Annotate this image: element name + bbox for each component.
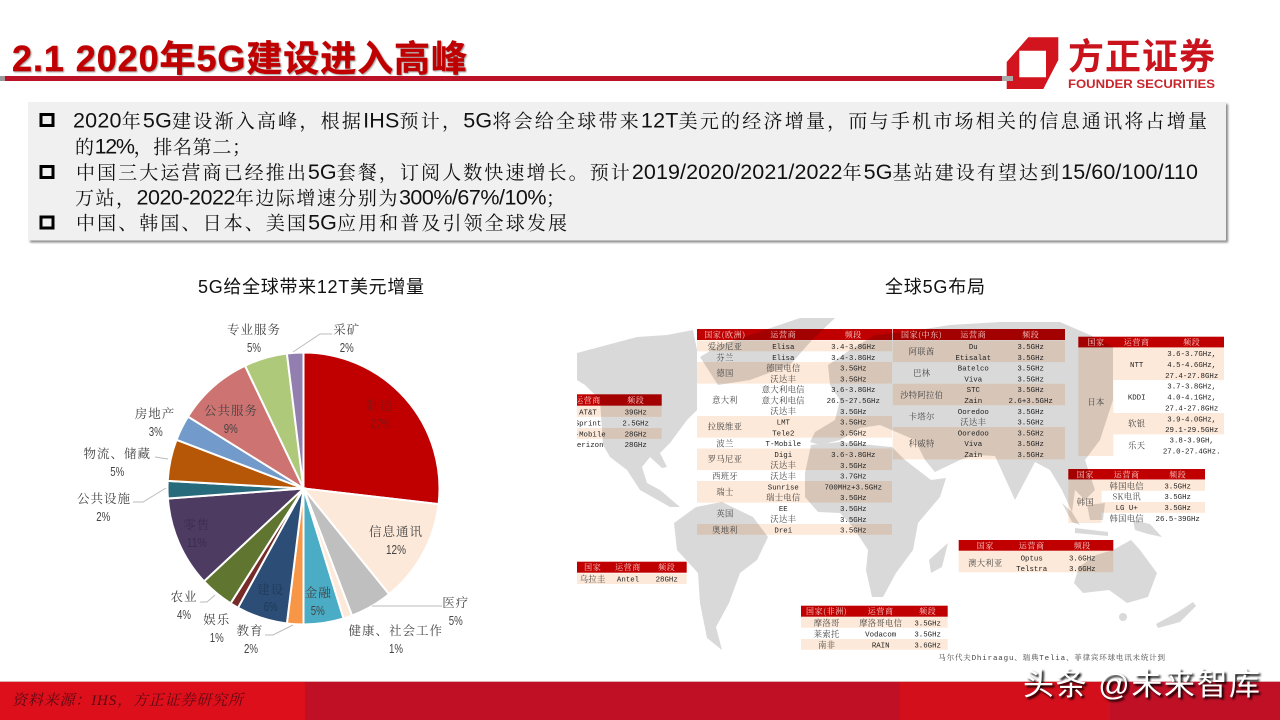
table: Europe: 沃达丰: [770, 470, 797, 482]
panel: key points: [28, 102, 1226, 240]
table: Africa: 莱索托: [814, 628, 840, 640]
table: Japan: KDDI: [1128, 394, 1146, 402]
table: Africa: 3.5GHz: [914, 620, 941, 628]
bullet point 2: 中国三大运营商已经推出5G套餐，订阅人数快速增长。预计2019/2020/2021/2022年5G基站建设有望达到15/60/100/110: [76, 160, 1198, 184]
table: Korea: [1068, 469, 1205, 524]
table: Korea: 韩国电信: [1110, 512, 1144, 524]
table: United States: Verizon: [572, 442, 604, 450]
table: Europe: 3.5GHz: [840, 495, 867, 503]
table: Africa: 3.6GHz: [914, 642, 941, 650]
pie chart: 12T increment by industry: 健康、社会工作: [348, 623, 443, 638]
table: Middle East: Du: [969, 344, 978, 352]
table: Korea: 国家: [1077, 470, 1094, 480]
map footnote: 马尔代夫Dhiraagu、瑞典Telia、菲律宾环球电讯未统计到: [938, 652, 1166, 663]
table: Japan: NTT: [1130, 362, 1144, 370]
table: Japan: 3.7-3.8GHz,: [1167, 384, 1216, 392]
table: United States: Sprint: [575, 420, 601, 428]
table: Middle East: 3.5GHz: [1017, 376, 1044, 384]
table: Japan: 3.8-3.9GH,: [1170, 438, 1214, 446]
table: United States: 运营商: [575, 395, 601, 406]
table: Europe: 沃达丰: [770, 405, 797, 417]
table: Europe: Elisa: [772, 344, 795, 352]
title rule: [0, 76, 1013, 81]
table: Middle East: 3.5GHz: [1017, 441, 1044, 449]
table: Europe: T-Mobile: [766, 441, 801, 449]
pie chart: 12T increment by industry: 教育: [236, 623, 264, 638]
pie chart: 12T increment by industry: 2%: [96, 510, 110, 524]
table: Europe: LMT: [777, 420, 791, 428]
pie chart: 12T increment by industry: 5%: [311, 604, 325, 618]
table: Africa: Vodacom: [865, 632, 897, 640]
table: Japan: 27.4-27.8GHz: [1165, 406, 1218, 414]
table: Africa: 摩洛哥: [814, 617, 840, 629]
table: Europe: 沃达丰: [770, 373, 797, 385]
pie chart: 12T increment by industry: 医疗: [442, 596, 469, 610]
table: Europe: 芬兰: [716, 351, 734, 363]
table: Japan: 3.6-3.7GHz,: [1167, 351, 1216, 359]
bullet point 2: [41, 160, 1198, 210]
table: Europe: 3.4-3.8GHz: [831, 344, 875, 352]
bullet point 1: 2020年5G建设渐入高峰，根据IHS预计，5G将会给全球带来12T美元的经济增量，而与手机市场相关的信息通讯将占增量: [73, 108, 1209, 132]
table: Japan: 国家: [1087, 337, 1105, 348]
table: Middle East: 3.5GHz: [1017, 430, 1044, 438]
table: Middle East: STC: [967, 387, 981, 395]
table: Middle East: 巴林: [913, 367, 931, 379]
bullet point 1: [41, 108, 1209, 158]
table: Europe: 3.5GHz: [840, 506, 867, 514]
table: Uruguay: Antel: [617, 576, 640, 584]
table: Europe: Tele2: [772, 430, 794, 438]
table: Europe: [697, 329, 892, 536]
watermark: 头条 @未来智库: [1023, 667, 1260, 702]
pie chart: 12T increment by industry: 金融: [305, 585, 332, 600]
table: Europe: 西班牙: [712, 470, 738, 482]
table: Africa: [801, 606, 948, 651]
table: Europe: 国家(欧洲): [704, 330, 746, 340]
table: Australia: 3.6GHz: [1069, 566, 1096, 574]
table: Australia: 运营商: [1019, 540, 1045, 551]
pie chart: 12T increment by industry: 5%: [110, 465, 124, 479]
table: Middle East: Ooredoo: [958, 430, 989, 438]
table: Europe: 3.5GHz: [840, 528, 867, 536]
pie chart: 12T increment by industry: 5%: [247, 341, 261, 355]
logo: Founder Securities: FOUNDER SECURITIES: [1068, 77, 1215, 91]
table: Middle East: [893, 329, 1065, 460]
table: Africa: 国家(非洲): [806, 606, 847, 617]
table: Europe: 波兰: [716, 438, 734, 450]
table: Middle East: 沃达丰: [960, 416, 987, 428]
pie chart: 12T increment by industry: 1%: [389, 642, 403, 656]
pie chart: 12T increment by industry: 2%: [244, 642, 258, 656]
table: Middle East: Etisalat: [956, 355, 991, 363]
table: Korea: 运营商: [1114, 470, 1140, 480]
table: Europe: 沃达丰: [770, 513, 797, 525]
table: Australia: Optus: [1021, 556, 1043, 564]
table: Europe: 奥地利: [712, 524, 738, 536]
table: Middle East: 3.5GHz: [1017, 409, 1044, 417]
table: Africa: 3.5GHz: [914, 632, 941, 640]
table: Australia: 澳大利亚: [968, 557, 1002, 569]
pie chart: 12T increment by industry: 4%: [177, 608, 191, 622]
table: Japan: 27.4-27.8GHz: [1165, 373, 1218, 381]
pie chart: 12T increment by industry: 12%: [386, 543, 406, 557]
table: Europe: Elisa: [772, 355, 795, 363]
table: Middle East: 频段: [1022, 330, 1039, 340]
table: Uruguay: 运营商: [615, 562, 641, 573]
table: Uruguay: 乌拉圭: [580, 573, 606, 585]
table: Korea: 韩国电信: [1110, 480, 1144, 492]
table: Middle East: 运营商: [960, 330, 986, 340]
table: Korea: 频段: [1169, 470, 1186, 480]
table: Middle East: Zain: [964, 452, 982, 460]
pie chart: 12T increment by industry: 农业: [170, 590, 198, 604]
pie chart: 12T increment by industry: 6%: [264, 600, 278, 614]
table: Europe: 频段: [845, 330, 862, 340]
table: Middle East: 科威特: [909, 438, 935, 450]
table: Japan: 4.5-4.6GHz,: [1167, 362, 1216, 370]
table: Uruguay: 28GHz: [656, 576, 678, 584]
table: Korea: SK电讯: [1112, 490, 1141, 502]
table: Europe: 瑞士: [716, 486, 734, 498]
logo: Founder Securities: [1002, 36, 1215, 91]
pie chart: 12T increment by industry: 制造: [366, 398, 394, 413]
world map: [577, 318, 1196, 650]
pie chart: 12T increment by industry: 零售: [183, 517, 210, 532]
source note: 资料来源：IHS，方正证券研究所: [12, 692, 246, 709]
table: Japan: 软银: [1128, 418, 1146, 430]
table: Middle East: 3.5GHz: [1017, 355, 1044, 363]
table: Europe: 意大利电信: [762, 384, 805, 396]
table: Australia: [959, 540, 1113, 574]
table: Europe: 3.7GHz: [840, 474, 867, 482]
table: Japan: 29.1-29.5GHz: [1165, 427, 1218, 435]
table: Korea: 3.5GHz: [1164, 505, 1191, 513]
table: Europe: 爱沙尼亚: [708, 340, 742, 352]
pie chart: 12T increment by industry: 物流、储藏: [84, 446, 151, 461]
pie chart: 12T increment by industry: 房地产: [135, 406, 175, 421]
pie chart: 12T increment by industry: 采矿: [333, 323, 360, 337]
table: United States: 28GHz: [625, 432, 647, 440]
table: Australia: 3.6GHz: [1069, 556, 1096, 564]
table: Europe: 意大利电信: [762, 394, 805, 406]
table: Japan: 频段: [1183, 337, 1200, 348]
table: Europe: 3.5GHz: [840, 376, 867, 384]
table: Europe: 运营商: [770, 330, 796, 340]
pie chart: 12T increment by industry: 建设: [257, 582, 284, 597]
table: Europe: 德国: [716, 367, 734, 379]
table: Africa: 频段: [919, 606, 936, 617]
table: Europe: 意大利: [712, 394, 738, 406]
logo: Founder Securities: 方正证券: [1068, 36, 1215, 77]
table: Japan: 乐天: [1128, 440, 1146, 452]
heading: pie chart: 5G给全球带来12T美元增量: [198, 277, 424, 297]
table: Middle East: 3.5GHz: [1017, 387, 1044, 395]
table: Middle East: 3.5GHz: [1017, 366, 1044, 374]
table: Europe: 瑞士电信: [766, 492, 801, 504]
table: Europe: 沃达丰: [770, 459, 797, 471]
table: Europe: 3.6-3.8GHz: [831, 452, 875, 460]
table: Japan: 3.9-4.0GHz,: [1167, 416, 1216, 424]
table: Europe: Digi: [774, 452, 793, 460]
pie chart: 12T increment by industry: 11%: [187, 536, 207, 550]
table: Europe: 3.5GHz: [840, 409, 867, 417]
table: Middle East: Viva: [964, 441, 983, 449]
table: United States: T-Mobile: [570, 432, 606, 440]
pie chart: 12T increment by industry: 公共设施: [77, 491, 131, 506]
table: Europe: 26.5-27.5GHz: [827, 398, 880, 406]
table: Europe: 拉脱维亚: [708, 420, 742, 432]
table: Japan: 4.0-4.1GHz,: [1167, 394, 1216, 402]
table: Europe: 罗马尼亚: [708, 453, 742, 465]
table: Middle East: 卡塔尔: [909, 410, 935, 422]
pie chart: 12T increment by industry: 2%: [340, 341, 354, 355]
pie chart: 12T increment by industry: 9%: [224, 422, 238, 436]
table: Africa: 运营商: [868, 606, 894, 617]
table: Uruguay: [577, 562, 687, 585]
table: Europe: 英国: [716, 508, 734, 520]
table: Middle East: 阿联酋: [909, 346, 935, 358]
table: Europe: 3.5GHz: [840, 441, 867, 449]
table: Europe: Drei: [774, 528, 793, 536]
table: Africa: 南非: [818, 639, 835, 651]
table: Europe: 3.5GHz: [840, 420, 867, 428]
table: Australia: 频段: [1074, 540, 1091, 551]
pie chart: 12T increment by industry: 27%: [371, 417, 391, 431]
table: Middle East: 3.5GHz: [1017, 344, 1044, 352]
table: Japan: [1078, 337, 1224, 457]
pie chart: 12T increment by industry: 娱乐: [203, 612, 230, 627]
table: Korea: 3.5GHz: [1164, 494, 1191, 502]
heading: world map: 全球5G布局: [885, 277, 985, 297]
table: Australia: 国家: [977, 540, 994, 551]
table: Europe: 德国电信: [766, 362, 801, 374]
table: Europe: 3.5GHz: [840, 430, 867, 438]
table: Africa: RAIN: [872, 642, 890, 650]
table: United States: 39GHz: [625, 410, 647, 418]
table: Japan: 运营商: [1124, 337, 1150, 348]
table: Middle East: 国家(中东): [901, 330, 942, 340]
table: Japan: 27.0-27.4GHz.: [1163, 449, 1221, 457]
table: Europe: 3.6-3.8GHz: [831, 387, 875, 395]
footer band: [0, 681, 1280, 720]
table: Middle East: Zain: [964, 398, 982, 406]
table: Middle East: 沙特阿拉伯: [900, 389, 943, 401]
table: Korea: 3.5GHz: [1164, 484, 1191, 492]
table: Europe: 3.5GHz: [840, 463, 867, 471]
table: Uruguay: 频段: [658, 562, 675, 573]
table: United States: 频段: [627, 395, 644, 406]
table: Korea: 韩国: [1077, 496, 1094, 508]
table: Europe: 3.4-3.8GHz: [831, 355, 875, 363]
table: United States: 2.5GHz: [622, 420, 649, 428]
table: United States: 28GHz: [625, 442, 647, 450]
pie chart: 12T increment by industry: 专业服务: [227, 322, 281, 337]
table: Europe: EE: [779, 506, 788, 514]
table: United States: [570, 394, 662, 450]
table: Uruguay: 国家: [584, 562, 601, 573]
table: United States: AT&T: [579, 410, 597, 418]
pie chart: 12T increment by industry: [77, 322, 469, 656]
table: Middle East: 3.5GHz: [1017, 420, 1044, 428]
table: Europe: 700MHz+3.5GHz: [824, 484, 882, 492]
table: Korea: LG U+: [1116, 505, 1138, 513]
table: Europe: 3.5GHz: [840, 366, 867, 374]
table: Australia: Telstra: [1016, 566, 1048, 574]
bullet point 1: 的12%，排名第二；: [75, 134, 253, 158]
pie chart: 12T increment by industry: 公共服务: [204, 403, 258, 418]
pie chart: 12T increment by industry: 5%: [449, 614, 463, 628]
pie chart: 12T increment by industry: 信息通讯: [369, 524, 423, 539]
table: Europe: Sunrise: [768, 484, 799, 492]
table: Africa: 摩洛哥电信: [859, 617, 903, 629]
table: Korea: 26.5-39GHz: [1156, 516, 1200, 524]
table: Middle East: Viva: [964, 376, 983, 384]
pie chart: 12T increment by industry: 1%: [210, 631, 224, 645]
pie chart: 12T increment by industry: 3%: [149, 425, 163, 439]
table: Japan: 日本: [1087, 396, 1105, 408]
table: Middle East: 2.6+3.5GHz: [1009, 398, 1053, 406]
title: 2.1 2020年5G建设进入高峰: [12, 38, 467, 79]
table: Middle East: Ooredoo: [958, 409, 989, 417]
table: Europe: 3.5GHz: [840, 517, 867, 525]
bullet point 2: 万站，2020-2022年边际增速分别为300%/67%/10%；: [75, 186, 567, 210]
bullet point 3: 中国、韩国、日本、美国5G应用和普及引领全球发展: [76, 210, 569, 234]
table: Middle East: Batelco: [958, 366, 989, 374]
table: Middle East: 3.5GHz: [1017, 452, 1044, 460]
